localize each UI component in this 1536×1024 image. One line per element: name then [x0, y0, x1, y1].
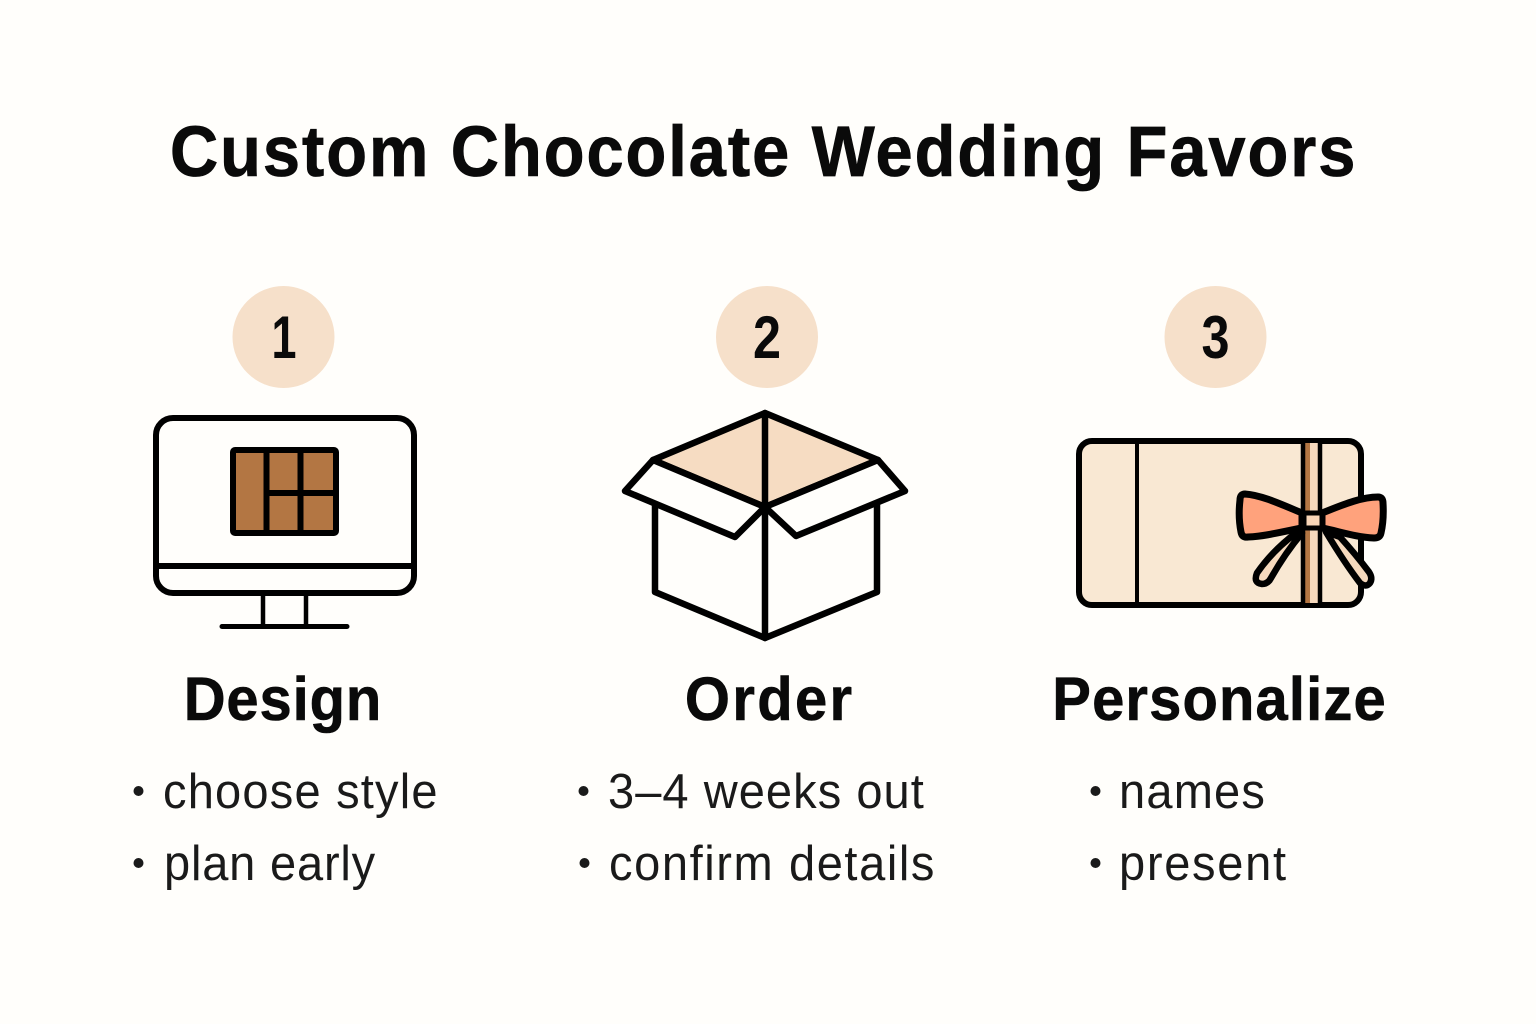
number badge 2	[716, 286, 818, 388]
heading: Design: Design	[184, 665, 381, 733]
icon: monitor with chocolate bar	[156, 418, 414, 626]
bullet list: personalize: names	[1119, 765, 1265, 819]
panel: step 2 order	[578, 286, 934, 891]
number badge 2: 2	[753, 304, 781, 371]
number badge 3: 3	[1202, 304, 1230, 371]
bullet list: design: choose style	[163, 765, 438, 819]
bullet list: personalize	[1090, 765, 1286, 891]
heading: Order: Order	[685, 665, 852, 733]
title: Custom Chocolate Wedding Favors	[170, 112, 1355, 191]
panel: step 3 personalize	[1052, 286, 1386, 891]
bullet list: order: 3–4 weeks out	[608, 765, 924, 819]
heading: Personalize: Personalize	[1052, 665, 1386, 733]
bullet list: design	[134, 765, 438, 891]
number badge 1: 1	[272, 304, 296, 371]
number badge 3	[1164, 286, 1266, 388]
bullet list: personalize: present	[1119, 837, 1286, 891]
icon: gift box with bow	[1079, 441, 1383, 605]
panel: step 1 design	[134, 286, 438, 891]
bullet list: order: confirm details	[609, 837, 934, 891]
icon: open box	[625, 413, 905, 638]
bullet list: design: plan early	[164, 837, 375, 891]
bullet list: order	[578, 765, 934, 891]
number badge 1	[232, 286, 334, 388]
